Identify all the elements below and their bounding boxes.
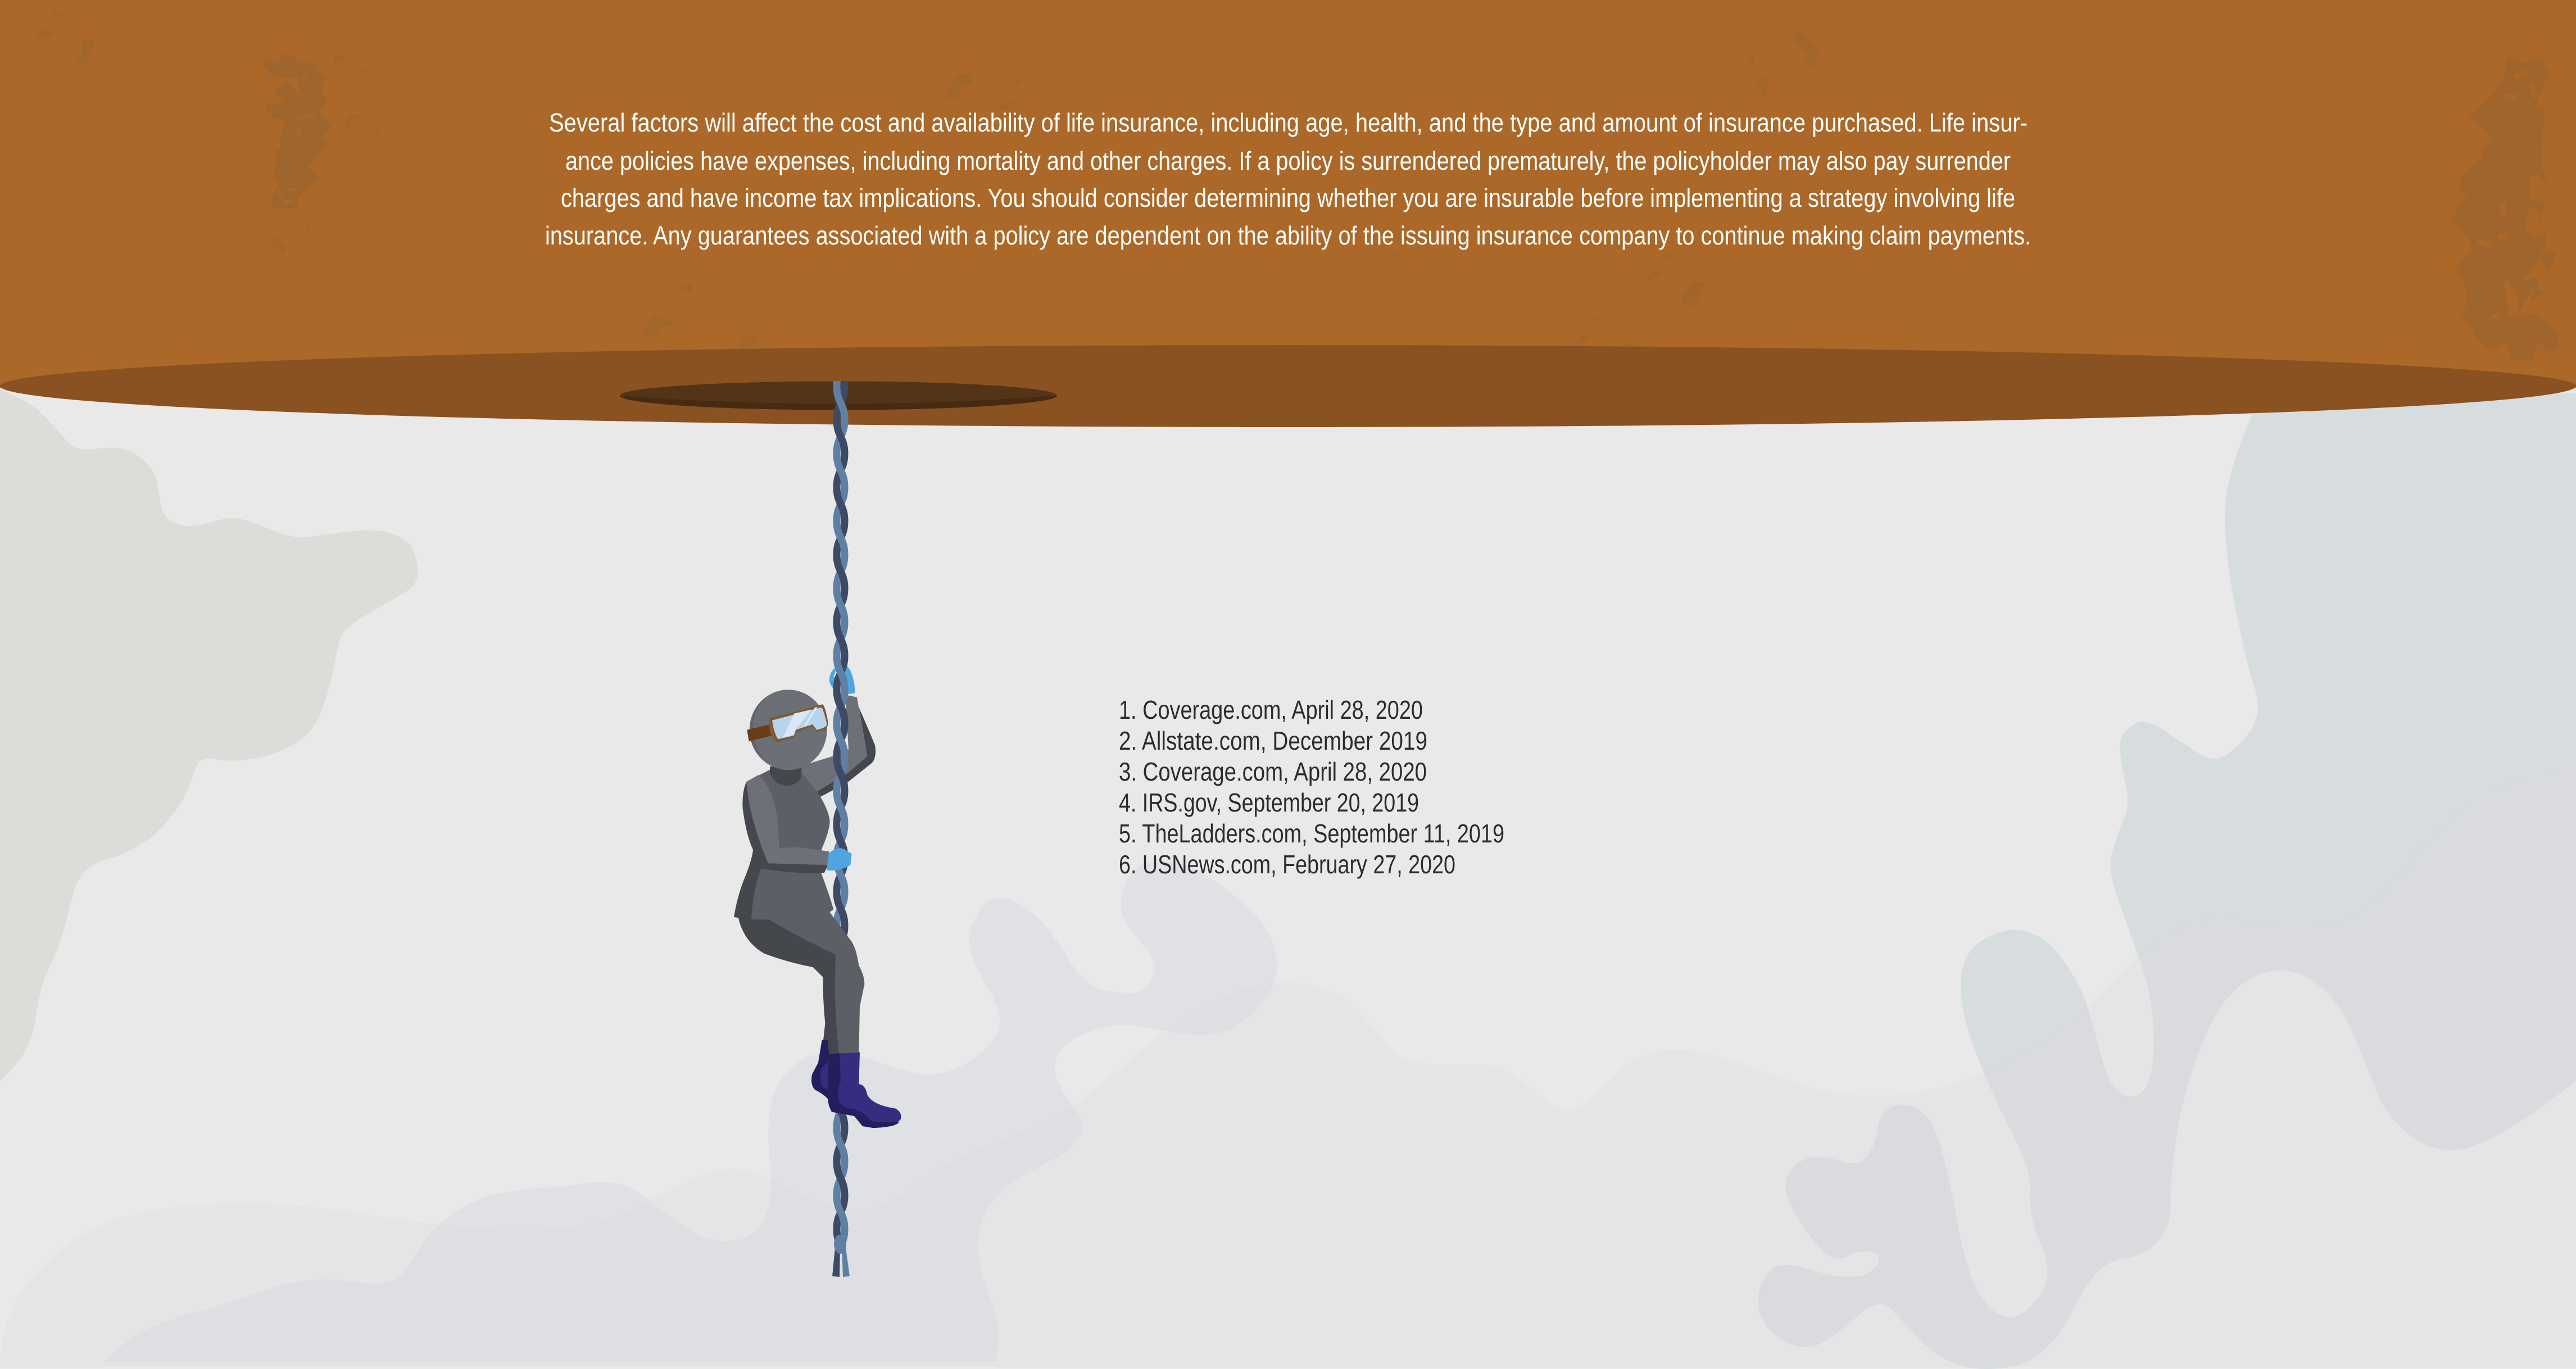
disclosure paragraph: Several factors will affect the cost and availability of life insurance, including age, health, and the type and amount of insurance purchased. Life insur- <box>549 108 2028 137</box>
panel: brown ceiling <box>0 0 2576 388</box>
rope <box>832 381 850 1277</box>
sources list <box>1119 695 1504 879</box>
stain flecks: right half <box>1362 30 1820 346</box>
background blob: lavender centre <box>103 862 1277 1362</box>
back leg and seat shadow <box>738 918 840 1054</box>
climber raised arm and upper glove <box>794 667 876 797</box>
disclosure paragraph: charges and have income tax implications. You should consider determining whether you are insurable before implementing a strategy involving life <box>561 183 2015 212</box>
background blob: right blue-grey <box>1758 393 2576 1369</box>
front leg <box>770 911 864 1054</box>
disclosure paragraph <box>545 108 2031 250</box>
front boot <box>828 1053 901 1128</box>
climber body <box>734 690 901 1128</box>
stain flecks: left half <box>34 12 1023 348</box>
sources list: 1. Coverage.com, April 28, 2020 <box>1119 695 1423 724</box>
sources list: 4. IRS.gov, September 20, 2019 <box>1119 788 1419 817</box>
torso <box>751 770 833 919</box>
stain: left large <box>264 55 381 255</box>
lower arm shadow <box>761 860 829 873</box>
ceiling stains <box>34 12 2558 360</box>
ceiling underside ellipse <box>0 345 2576 427</box>
head <box>750 690 827 770</box>
sources list: 5. TheLadders.com, September 11, 2019 <box>1119 819 1504 848</box>
stain: right large <box>2451 58 2558 360</box>
back boot <box>811 1040 830 1099</box>
lower glove <box>827 848 852 871</box>
sources list: 2. Allstate.com, December 2019 <box>1119 726 1427 755</box>
arm <box>746 775 829 865</box>
background blob: pink translucent ground <box>0 764 2576 1367</box>
disclosure paragraph: ance policies have expenses, including mortality and other charges. If a policy is surrendered prematurely, the policyholder may also pay surrender <box>565 146 2011 175</box>
torso back shadow <box>734 782 770 919</box>
background blob: left grey <box>0 382 418 1081</box>
hole in ceiling <box>620 381 1057 410</box>
disclosure paragraph: insurance. Any guarantees associated with a policy are dependent on the ability of the issuing insurance company to continue making claim payments. <box>545 221 2031 250</box>
goggles <box>747 704 828 742</box>
sources list: 6. USNews.com, February 27, 2020 <box>1119 850 1455 879</box>
neck <box>770 767 802 786</box>
sources list: 3. Coverage.com, April 28, 2020 <box>1119 757 1427 786</box>
